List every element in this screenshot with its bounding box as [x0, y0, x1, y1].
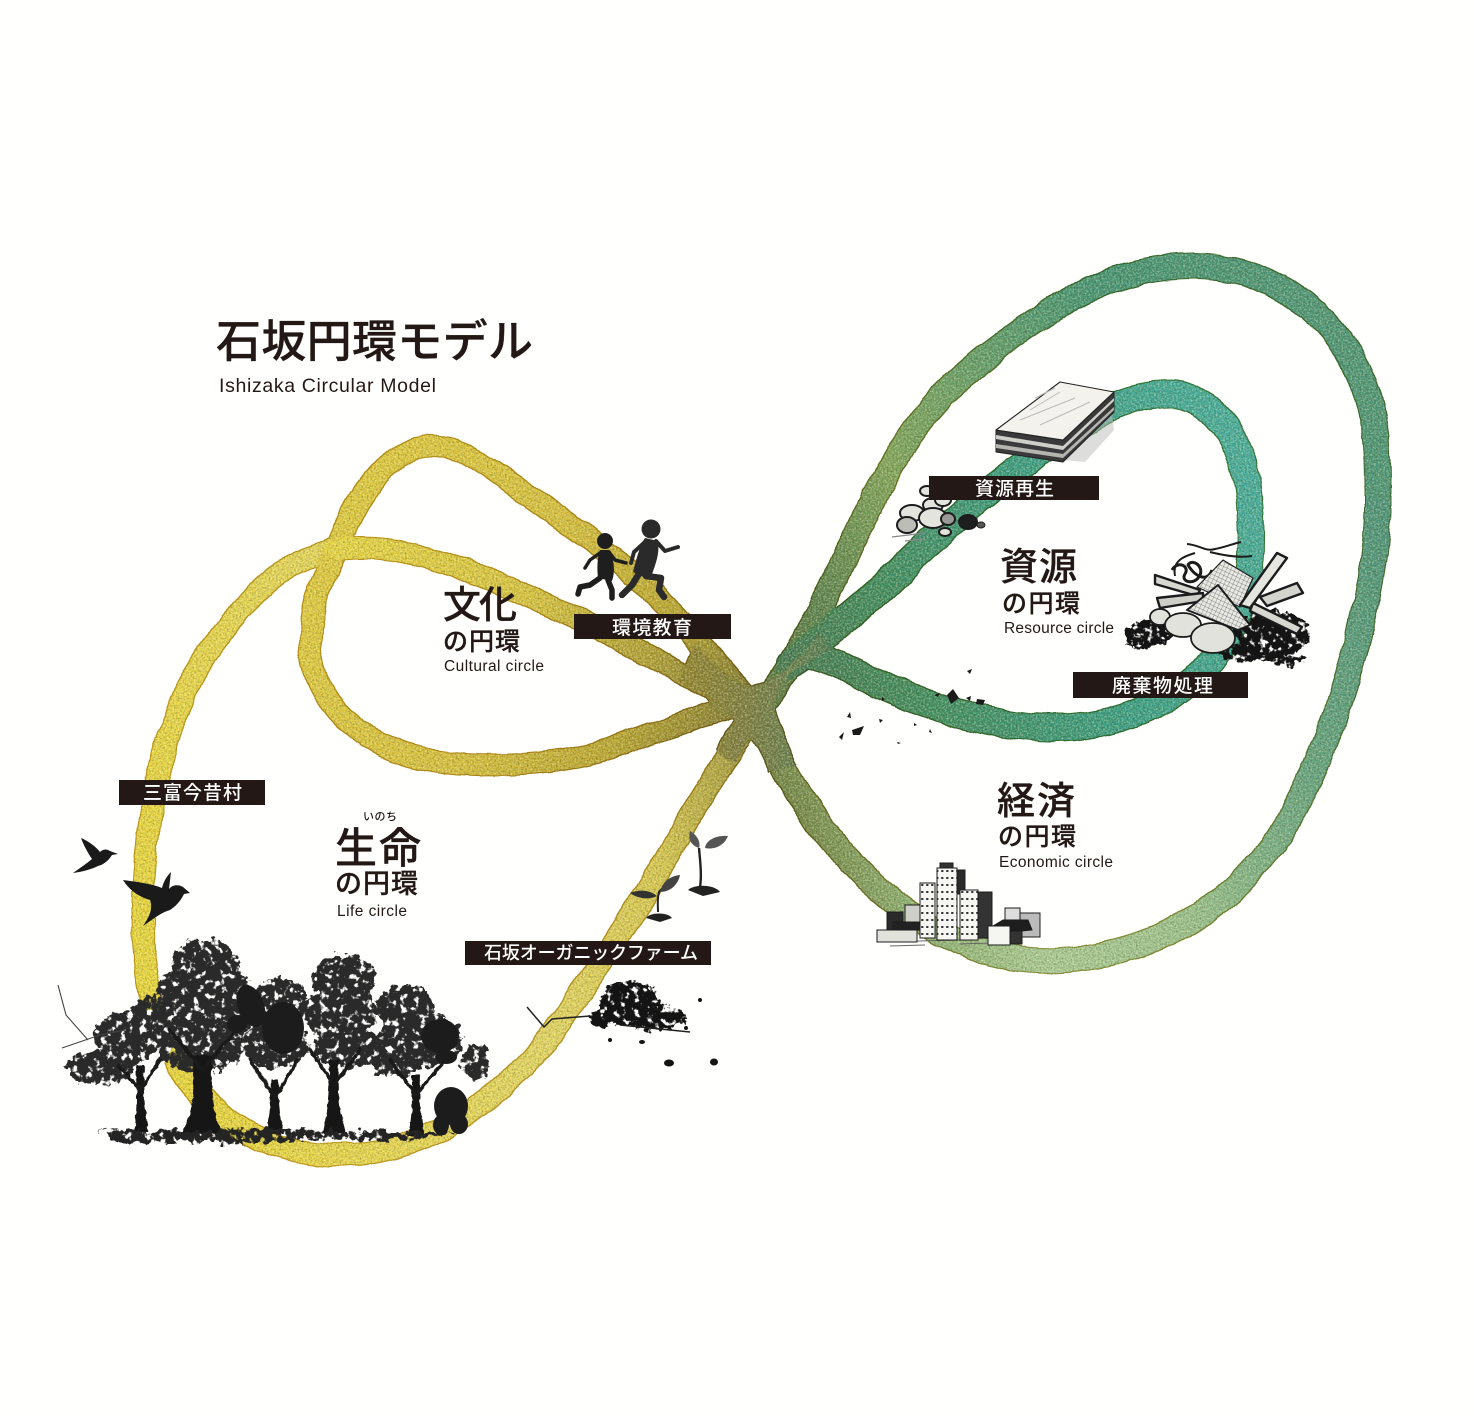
icon: running children: [578, 520, 678, 598]
crown backing: [128, 960, 375, 1070]
centre junction: [680, 632, 834, 772]
icon: compost pile: [527, 981, 718, 1066]
label: santome: [119, 778, 265, 805]
tower centre: [957, 870, 965, 894]
label: resource regeneration: 資源再生: [975, 474, 1054, 501]
icon: bird small: [73, 838, 118, 873]
tree crowns: [68, 938, 488, 1085]
branches: [118, 1025, 445, 1098]
icon: city buildings: [877, 863, 1040, 946]
beam upright: [1240, 553, 1287, 608]
seedling tall: [688, 831, 728, 896]
icon: big runner: [622, 520, 678, 597]
icon: small runner: [578, 533, 626, 598]
infinity diagram ribbons: [142, 266, 1378, 1156]
houses right: [1005, 908, 1020, 922]
ground: [878, 940, 990, 946]
heading: life circle: [335, 808, 421, 920]
label: resource regeneration: [929, 474, 1099, 501]
wires tangle: [1175, 542, 1252, 576]
label: environmental education: 環境教育: [612, 613, 692, 640]
heading: cultural circle: の円環: [443, 622, 520, 658]
icon: bird large: [123, 872, 190, 926]
label: waste processing: [1073, 671, 1248, 698]
beam lower right: [1250, 603, 1302, 634]
mesh sheet back: [1197, 560, 1253, 607]
seedling small: [630, 875, 680, 922]
heading: cultural circle: 文化: [443, 574, 517, 629]
low block left: [887, 912, 903, 930]
tree trunks: [134, 1055, 425, 1136]
stray twig: [58, 985, 125, 1048]
heading: life circle: Life circle: [337, 903, 407, 920]
label: santome: 三富今昔村: [143, 778, 242, 805]
icon: waste rubble pile: [1122, 542, 1310, 666]
ground grass: [96, 1129, 460, 1144]
ribbon: life circle: [142, 545, 748, 1156]
beam right: [1260, 583, 1303, 606]
black leaves: [227, 981, 468, 1135]
heading: resource circle: Resource circle: [1004, 620, 1114, 637]
beam left: [1155, 575, 1200, 596]
label: environmental education: [574, 613, 731, 640]
heading: cultural circle: [443, 574, 544, 675]
rocks: [1150, 609, 1235, 653]
label: waste processing: 廃棄物処理: [1112, 671, 1213, 698]
title subtitle: Ishizaka Circular Model: [219, 375, 436, 397]
title: 石坂円環モデル: [216, 305, 533, 370]
heading: life circle: の円環: [335, 862, 418, 901]
label: organic farm: 石坂オーガニックファーム: [484, 939, 698, 965]
heading: economic circle: 経済: [997, 770, 1075, 825]
icon: seedlings: [630, 831, 728, 922]
heading: life circle: いのち: [363, 808, 397, 824]
ribbon: economic circle upper: [765, 266, 1378, 700]
heading: economic circle: の円環: [998, 817, 1076, 853]
ribbon: resource circle: [790, 394, 1252, 728]
beam lower left: [1157, 593, 1203, 608]
heading: economic circle: [997, 770, 1113, 871]
tower left: [920, 883, 935, 938]
ribbon: economic circle lower: [760, 508, 1378, 960]
heading: resource circle: の円環: [1002, 584, 1080, 620]
icon: rocks pile: [892, 486, 985, 541]
heading: cultural circle: Cultural circle: [444, 658, 544, 675]
icon: stacked paper sheets: [996, 382, 1114, 462]
icon: debris specks: [839, 669, 985, 744]
illustration: forest: [58, 938, 488, 1144]
heading: life circle: 生命: [335, 815, 421, 876]
ribbon: cultural connector: [335, 548, 750, 708]
soil base: [1122, 610, 1310, 666]
ribbon: cultural circle: [311, 446, 750, 765]
block right: [978, 892, 992, 938]
heading: resource circle: [1000, 536, 1114, 637]
mesh sheet front: [1187, 585, 1250, 630]
heading: resource circle: 資源: [1000, 536, 1077, 591]
heading: economic circle: Economic circle: [999, 854, 1113, 871]
